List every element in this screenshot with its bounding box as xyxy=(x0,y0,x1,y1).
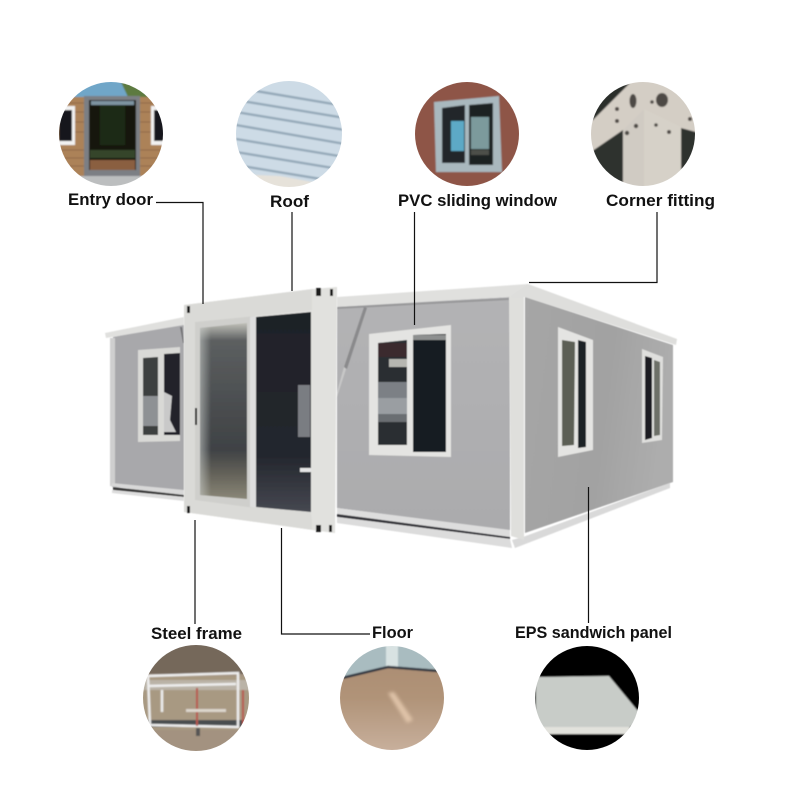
right side wall xyxy=(509,284,677,548)
leader line: entry door xyxy=(156,202,203,304)
panel: corner fitting photo xyxy=(591,82,695,186)
label: EPS sandwich panel: EPS sandwich panel xyxy=(515,624,672,642)
leader line: steel frame xyxy=(194,520,196,624)
panel: steel frame photo xyxy=(143,645,249,751)
leader line: roof xyxy=(291,212,293,291)
illustration: expandable container house xyxy=(105,284,677,548)
left wing xyxy=(105,317,184,501)
leader line: corner fitting xyxy=(529,212,657,282)
panel: floor photo xyxy=(340,646,444,750)
leader line: PVC sliding window xyxy=(414,212,416,325)
label: PVC sliding window: PVC sliding window xyxy=(398,192,557,210)
label: Corner fitting: Corner fitting xyxy=(606,192,715,210)
label: Floor: Floor xyxy=(372,624,414,642)
label: Steel frame: Steel frame xyxy=(151,625,242,643)
panel: PVC window photo xyxy=(415,82,519,186)
centre door frame xyxy=(184,287,337,533)
corner post xyxy=(509,297,524,540)
panel: entry door photo xyxy=(59,82,163,186)
panel: EPS sandwich panel photo xyxy=(535,646,639,750)
leader line: floor xyxy=(282,528,370,634)
main front wall xyxy=(337,284,528,548)
leader line: EPS sandwich panel xyxy=(588,487,590,623)
label: Entry door: Entry door xyxy=(68,191,154,209)
label: Roof: Roof xyxy=(270,193,310,211)
panel: roof photo xyxy=(236,81,342,187)
